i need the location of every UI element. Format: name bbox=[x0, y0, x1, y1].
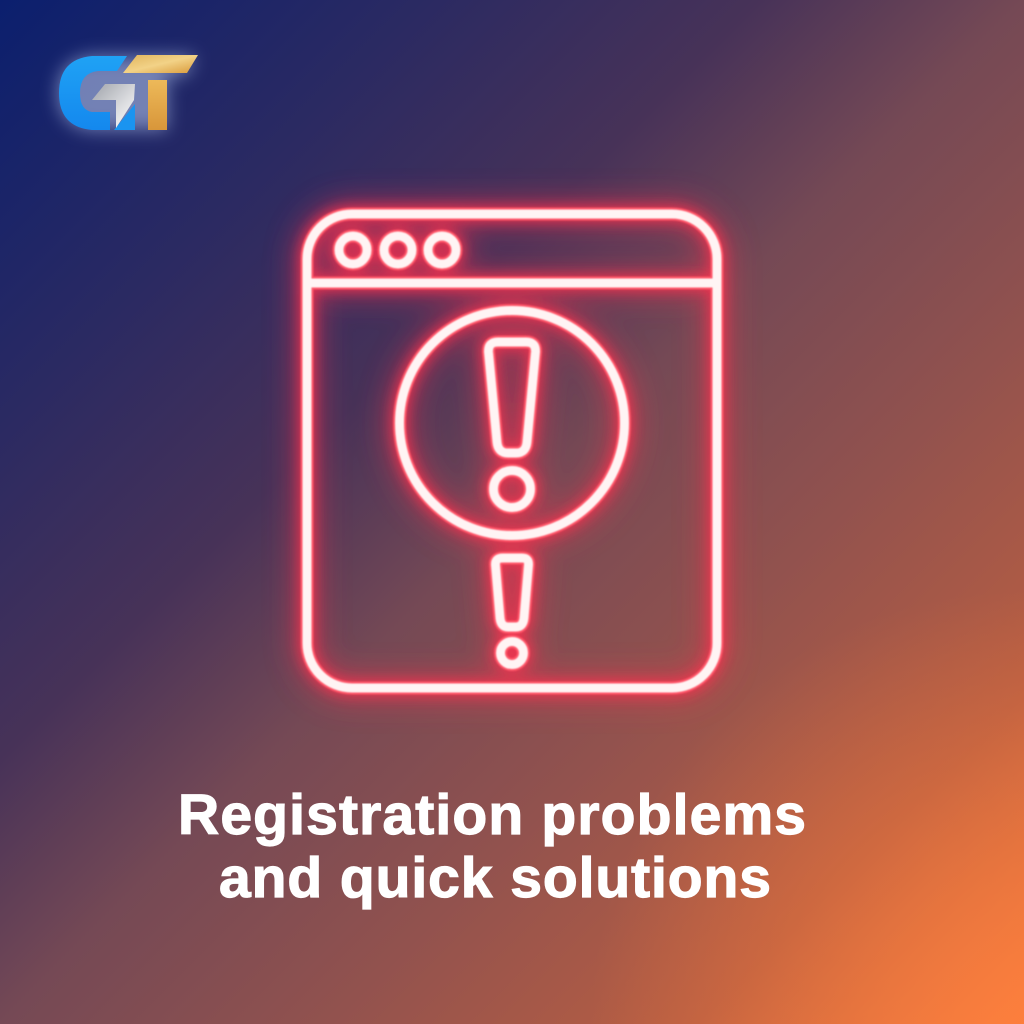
title line 1: Registration problems bbox=[178, 783, 806, 847]
neon outer glow bbox=[307, 214, 717, 688]
logo silver stroke bbox=[92, 84, 135, 128]
title line 2: and quick solutions bbox=[219, 846, 771, 910]
logo lower wedge bbox=[114, 104, 135, 130]
logo letter G bbox=[59, 56, 127, 130]
neon inner glow bbox=[307, 214, 717, 688]
logo letter T bbox=[123, 55, 198, 73]
logo: GT bbox=[58, 55, 198, 130]
logo glow bbox=[58, 56, 196, 130]
title bbox=[178, 783, 806, 910]
neon window with warning icon bbox=[307, 214, 717, 688]
neon pink edge bbox=[307, 214, 717, 688]
neon white core bbox=[307, 214, 717, 688]
